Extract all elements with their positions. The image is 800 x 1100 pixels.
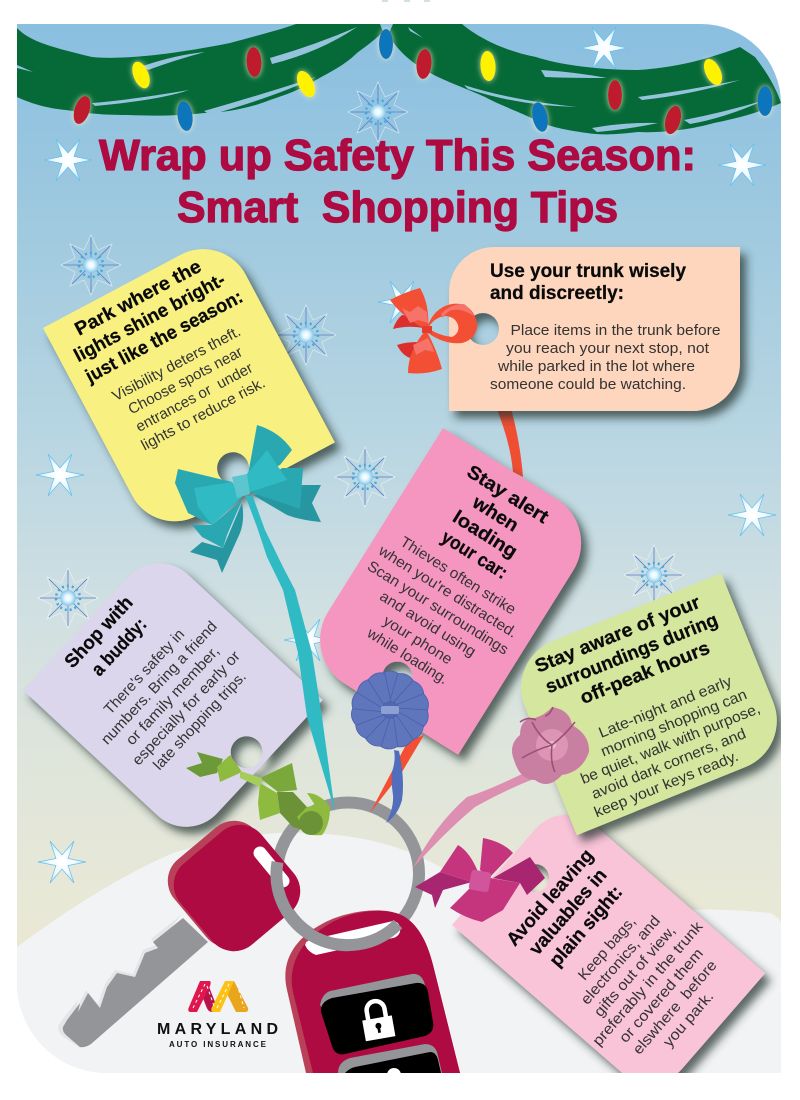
- keychain: ring front: [276, 862, 398, 945]
- logo: Maryland Auto Insurance: MARYLAND: [157, 1021, 278, 1038]
- panel: park where the lights shine bright: Park where the: [71, 256, 205, 340]
- panel: avoid leaving valuables in plain sight: valuables in: [525, 865, 611, 960]
- panel: stay aware of your surroundings: avoid dark corners, and: [589, 725, 749, 803]
- keychain: ring back: [277, 802, 419, 944]
- panel: stay alert when loading your car: Thieves often strike: [397, 533, 519, 618]
- panel: stay alert when loading your car: [300, 428, 601, 755]
- panel: avoid leaving valuables in plain sight: preferably in the trunk: [589, 918, 707, 1050]
- panel: stay aware of your surroundings: keep your keys ready.: [592, 748, 741, 821]
- panel: avoid leaving valuables in plain sight: Keep bags,: [575, 913, 639, 984]
- panel: park where the lights shine bright: entrances or under: [133, 360, 256, 436]
- panel: shop with a buddy: Shop with: [61, 592, 138, 673]
- garland: [17, 24, 781, 134]
- string lights: [70, 29, 772, 136]
- panel: stay aware of your surroundings: be quiet, walk with purpose,: [578, 700, 763, 788]
- panel: stay alert when loading your car: while loading.: [363, 624, 451, 688]
- fob button 1: [320, 974, 426, 1007]
- panel: stay alert when loading your car: when: [468, 492, 522, 536]
- fob button 2: [338, 1044, 442, 1073]
- panel: park where the lights shine bright: Choose spots near: [125, 343, 246, 418]
- panel: avoid leaving valuables in plain sight: plain sight:: [546, 882, 627, 971]
- panel: shop with a buddy: numbers. Bring a friend: [98, 618, 221, 748]
- logo mark: [188, 981, 248, 1012]
- panel: use your trunk wisely: Use your trunk wisely: [490, 261, 686, 282]
- top edge fragment: [382, 0, 430, 2]
- panel: park where the lights shine bright: lights shine bright-: [71, 269, 229, 367]
- panel: park where the lights shine bright: just like the season:: [81, 287, 247, 388]
- panel: use your trunk wisely: while parked in the lot where: [497, 358, 695, 375]
- red ribbon to trunk tag: [498, 411, 523, 477]
- blue rosette: [350, 670, 430, 823]
- snowflakes: [36, 27, 776, 883]
- pink ribbon: [413, 770, 536, 868]
- panel: stay aware of your surroundings: Late-night and early: [596, 673, 735, 742]
- title: Wrap up Safety This Season:: [99, 132, 696, 180]
- orange ribbon tail: [370, 735, 424, 813]
- panel: avoid leaving valuables in plain sight: you park.: [660, 988, 717, 1051]
- panel: shop with a buddy: late shopping trips.: [150, 668, 250, 774]
- title: Smart Shopping Tips: [177, 184, 618, 232]
- teal ribbon: [245, 495, 335, 812]
- teal bow: [175, 425, 321, 573]
- panel: stay alert when loading your car: your phone: [380, 612, 455, 668]
- panel: stay alert when loading your car: Stay alert: [463, 461, 553, 528]
- panel: use your trunk wisely: someone could be watching.: [490, 376, 686, 393]
- snow hill: [17, 833, 781, 1073]
- panel: avoid leaving valuables in plain sight: electronics, and: [578, 913, 664, 1008]
- panel: shop with a buddy: a buddy:: [88, 614, 151, 680]
- panel: stay aware of your surroundings: [506, 573, 792, 835]
- panel: use your trunk wisely: [449, 247, 740, 411]
- panel: avoid leaving valuables in plain sight: gifts out of view,: [591, 922, 679, 1020]
- key slot: [260, 853, 283, 881]
- title: [99, 132, 696, 232]
- panel: avoid leaving valuables in plain sight: Avoid leaving: [503, 845, 598, 950]
- panel: stay alert when loading your car: when you're distracted.: [375, 542, 520, 642]
- panel: use your trunk wisely: you reach your next stop, not: [506, 340, 710, 357]
- panel: use your trunk wisely: and discreetly:: [490, 283, 624, 304]
- dusty pink flower: [512, 707, 589, 784]
- red bow: [390, 288, 477, 374]
- panel: stay aware of your surroundings: Stay aware of your: [532, 592, 704, 678]
- green bow: [186, 752, 330, 835]
- panel: stay alert when loading your car: your car:: [437, 527, 511, 584]
- panel: use your trunk wisely: Place items in the trunk before: [510, 322, 720, 339]
- car key: [58, 809, 312, 1048]
- panel: stay alert when loading your car: Scan your surroundings: [364, 558, 511, 658]
- panel: avoid leaving valuables in plain sight: [452, 814, 776, 1073]
- panel: stay alert when loading your car: loading: [449, 507, 521, 563]
- panel: shop with a buddy: There's safety in: [101, 626, 188, 718]
- panel: shop with a buddy: [23, 546, 323, 844]
- panel: stay aware of your surroundings: surroundings during: [543, 610, 721, 698]
- panel: stay alert when loading your car: and avoid using: [377, 588, 479, 661]
- icon: padlock: [359, 999, 395, 1041]
- panel: park where the lights shine bright: Visibility deters theft.: [109, 323, 244, 405]
- panel: stay aware of your surroundings: off-peak hours: [577, 638, 713, 709]
- key head: [168, 820, 253, 944]
- panel: park where the lights shine bright: [43, 232, 335, 538]
- key fob: [285, 910, 460, 1082]
- fob slot: [305, 921, 400, 955]
- logo: Maryland Auto Insurance: AUTO INSURANCE: [169, 1040, 267, 1049]
- panel: stay aware of your surroundings: morning shopping can: [598, 686, 749, 760]
- magenta bow: [415, 838, 545, 922]
- panel: park where the lights shine bright: lights to reduce risk.: [138, 374, 268, 454]
- panel: shop with a buddy: or family member,: [123, 643, 223, 749]
- panel: avoid leaving valuables in plain sight: or covered them: [616, 945, 707, 1046]
- logo: Maryland Auto Insurance: [157, 981, 278, 1049]
- panel: avoid leaving valuables in plain sight: elswhere before: [630, 957, 720, 1058]
- panel: shop with a buddy: especially for early or: [129, 648, 244, 769]
- key blade: [58, 915, 181, 1048]
